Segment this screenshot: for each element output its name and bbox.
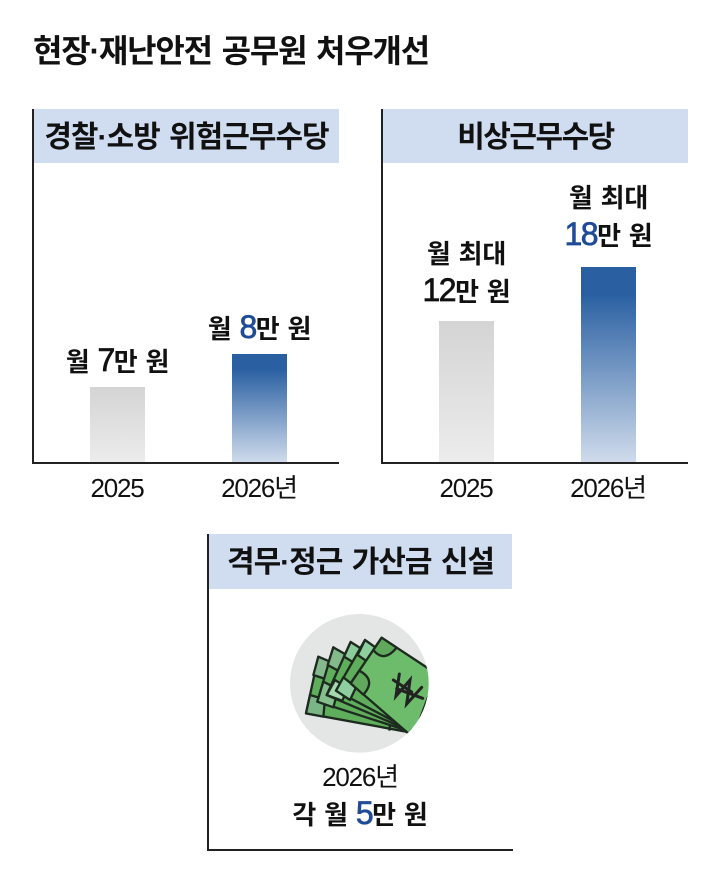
heading: emergency duty allowance: 비상근무수당 [457, 121, 614, 154]
bar: 2025 [439, 321, 494, 462]
axis: horizontal [32, 462, 339, 464]
axis: horizontal [207, 849, 513, 851]
heading: new allowance: 격무·정근 가산금 신설 [227, 546, 494, 579]
heading: police and fire hazard allowance: 경찰·소방 위험근무수당 [44, 121, 329, 154]
value: 2026: 18만 원 [564, 216, 653, 252]
value: 2025 [422, 239, 511, 308]
axis: vertical [381, 109, 383, 464]
value: 2026: 월 8만 원 [208, 309, 311, 345]
axis: vertical [32, 109, 34, 464]
bar: 2026 [232, 354, 287, 462]
value: 2025: 12만 원 [422, 272, 511, 308]
axis: vertical [207, 534, 209, 851]
icon: banknotes [290, 614, 429, 752]
value: 5 per month: 각 월 5만 원 [292, 795, 428, 831]
bar: 2025 [90, 387, 145, 462]
value: 2025: 월 7만 원 [66, 342, 169, 378]
title: 현장·재난안전 공무원 처우개선 [33, 33, 429, 69]
label: 2026 left: 2026년 [221, 473, 297, 503]
label: 2025 left: 2025 [90, 473, 144, 503]
value: 2026: 월 최대 [569, 183, 648, 213]
label: 2026: 2026년 [322, 762, 398, 792]
panel: police and fire hazard allowance [32, 109, 339, 464]
axis: horizontal [381, 462, 688, 464]
value: 2025: 월 최대 [427, 239, 506, 269]
panel: new duty and regular work allowance [207, 534, 513, 851]
heading: police and fire hazard allowance [34, 109, 339, 163]
bar: 2026 [581, 267, 636, 462]
label: 2026 right: 2026년 [570, 473, 646, 503]
heading: new allowance [209, 534, 512, 589]
panel: emergency duty allowance [381, 109, 688, 464]
label: 2025 right: 2025 [439, 473, 493, 503]
value: 2026 [564, 183, 653, 252]
heading: emergency duty allowance [383, 109, 688, 163]
